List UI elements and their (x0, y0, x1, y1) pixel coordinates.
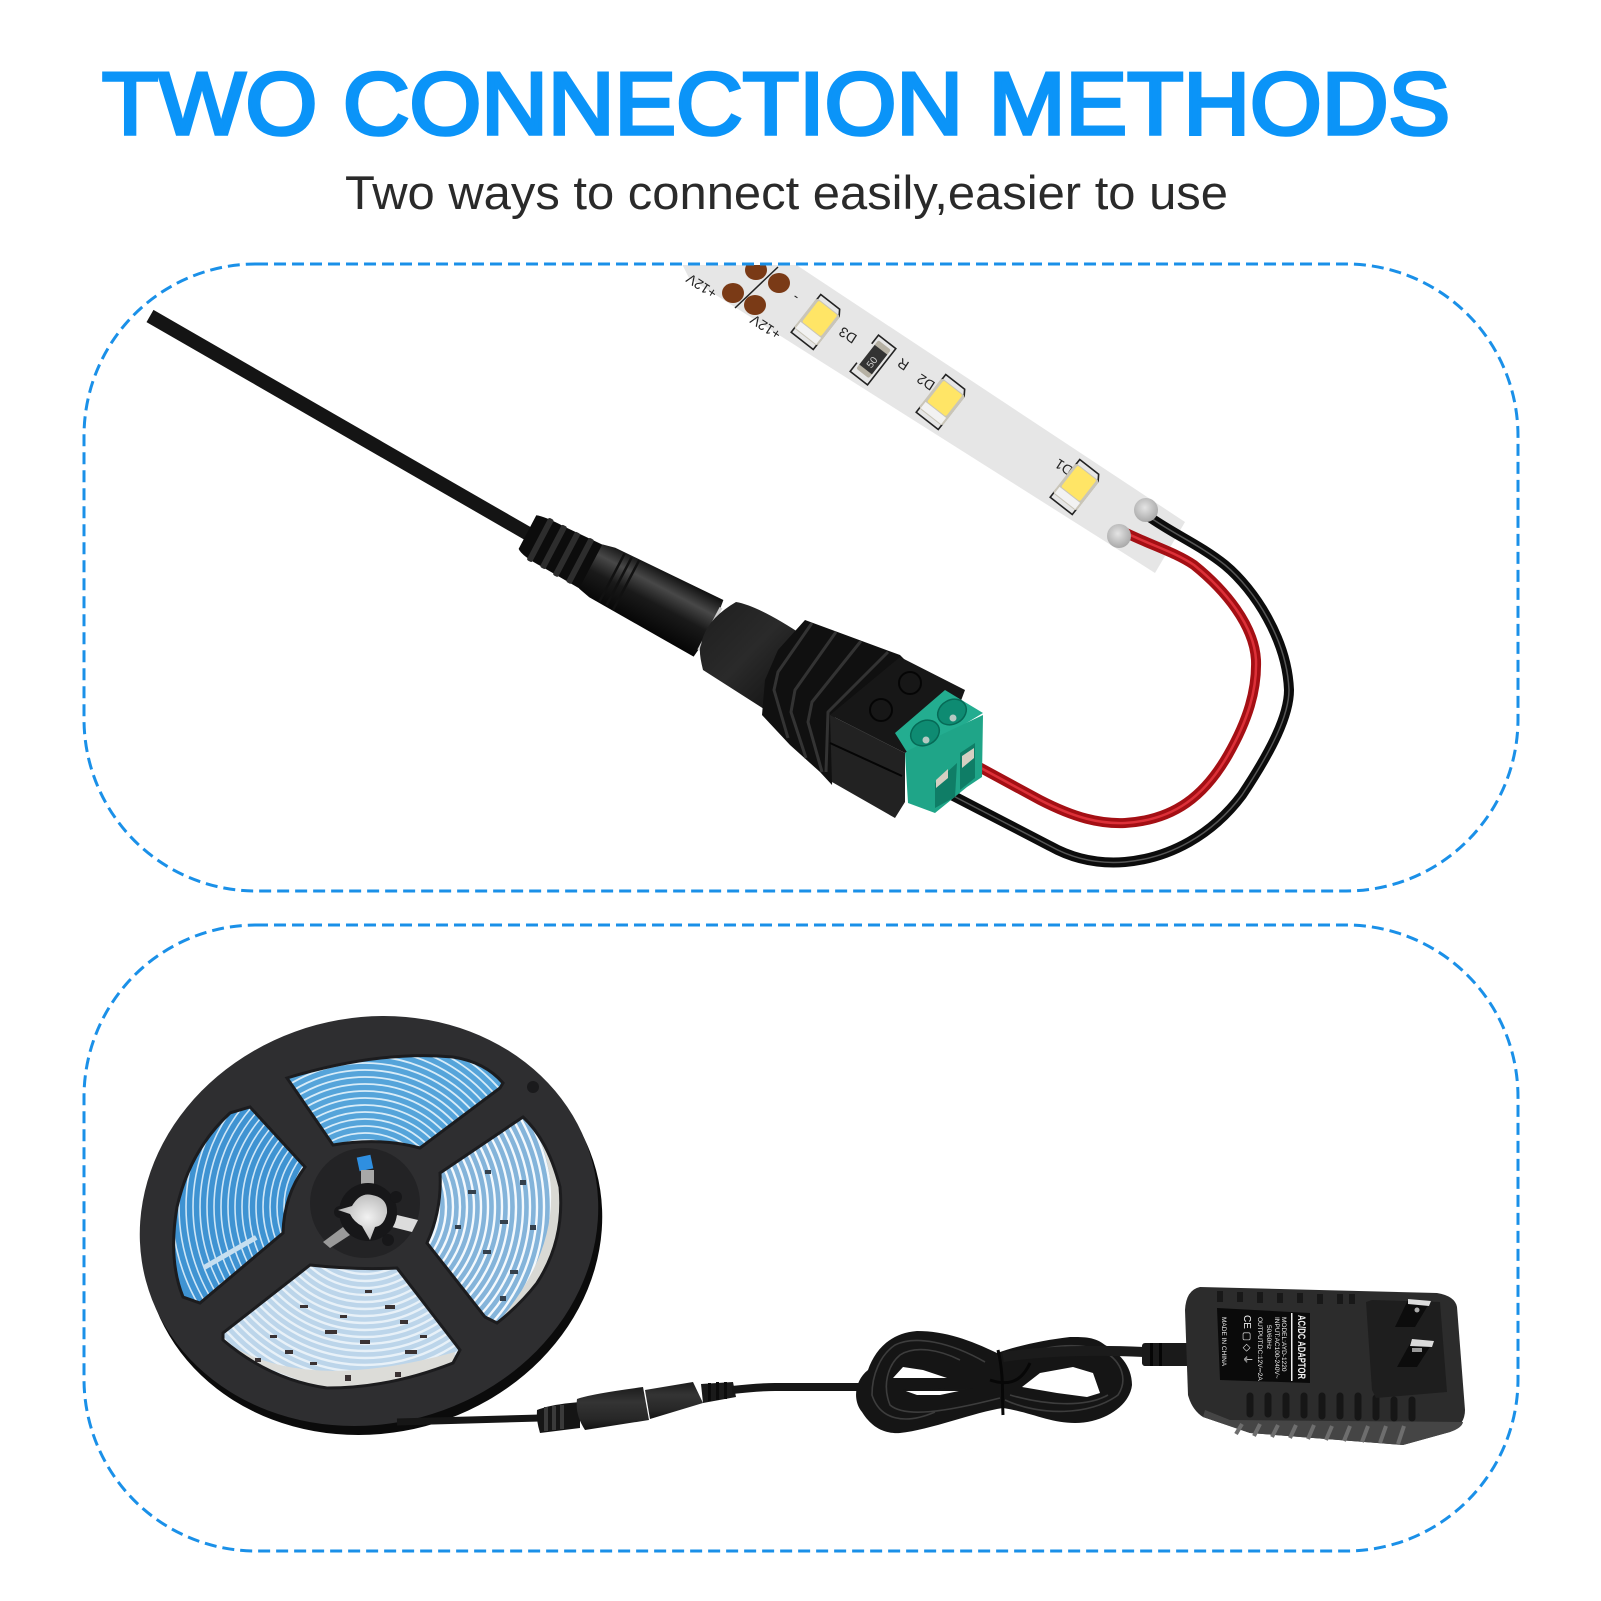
adapter label: AC/DC ADAPTOR (1295, 1315, 1307, 1379)
plug prongs (1395, 1299, 1434, 1367)
adapter label: MADE IN CHINA (1220, 1317, 1227, 1367)
resistor: 50 (865, 355, 881, 371)
green terminal (895, 690, 983, 813)
adapter label: OUTPUT:DC:12V⎓2A (1256, 1317, 1263, 1381)
adapter label: 50/60Hz (1265, 1325, 1272, 1349)
inline DC connector (537, 1382, 736, 1433)
strip print: +12V (747, 311, 784, 343)
reel shadow rim (97, 974, 649, 1486)
strip print: D3 (836, 324, 860, 347)
reel cable (397, 1418, 540, 1422)
LED D3 (790, 294, 844, 350)
cable to coil (732, 1387, 1000, 1390)
bottom window (224, 1266, 458, 1386)
figure-eight coil (856, 1331, 1145, 1433)
cable (150, 316, 532, 536)
adapter label: INPUT:AC100-240V~ (1273, 1317, 1280, 1379)
black wire (936, 516, 1289, 862)
reel disc (93, 965, 645, 1477)
red wire (968, 531, 1256, 823)
female DC jack (512, 505, 726, 658)
strip print (683, 270, 1076, 479)
top window (289, 1057, 502, 1146)
panel: LED reel (93, 965, 1465, 1486)
strip print: D2 (914, 371, 938, 394)
LED D1 (1049, 459, 1103, 515)
adapter label: MODEL:AYD-1220 (1280, 1317, 1287, 1372)
copper pads (722, 260, 790, 315)
dashed panel 1 (84, 264, 1518, 891)
strip print: R (894, 355, 912, 374)
subtitle: Two ways to connect easily,easier to use (345, 166, 1228, 219)
reel hub (310, 1148, 420, 1258)
LED strip (681, 260, 1185, 573)
window rims (174, 1056, 561, 1388)
resistor (850, 335, 896, 385)
LED D2 (915, 374, 969, 430)
solder points (1107, 498, 1158, 548)
strip print: D1 (1052, 456, 1076, 479)
adapter label (1217, 1308, 1310, 1383)
adapter strain relief (1142, 1343, 1190, 1366)
strip print: +12V (683, 270, 720, 302)
power adapter (1185, 1287, 1465, 1445)
strip print: - (789, 290, 802, 306)
left window (175, 1108, 304, 1302)
right window (428, 1119, 560, 1322)
title: TWO CONNECTION METHODS (102, 54, 1450, 153)
dashed panel 2 (84, 925, 1518, 1551)
black terminal block (830, 657, 965, 818)
adapter label: CE ▢ ◇ ⏚ (1241, 1315, 1253, 1364)
male connector barrel (700, 602, 810, 716)
panel: strip with terminal connector (150, 260, 1289, 862)
ridged connector body (762, 620, 905, 785)
plug recess (1366, 1300, 1447, 1398)
